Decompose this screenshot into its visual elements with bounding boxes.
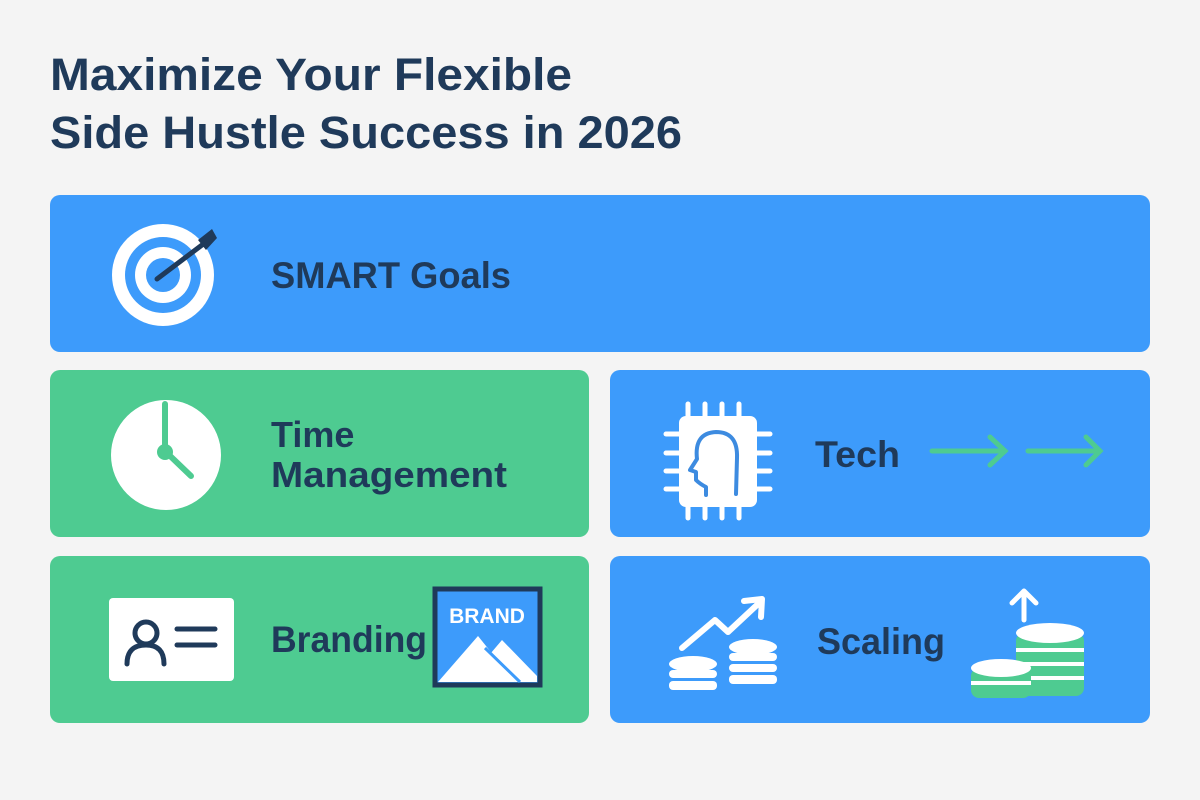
icon: profile card bbox=[109, 598, 234, 681]
icon: clock bbox=[111, 400, 221, 510]
title bbox=[50, 49, 682, 158]
arrows bbox=[932, 437, 1100, 465]
title: Maximize Your Flexible bbox=[50, 49, 572, 100]
panel: Branding bbox=[50, 556, 589, 723]
panel: Time Management bbox=[50, 370, 589, 537]
icon: brand poster bbox=[435, 589, 540, 685]
panel: SMART Goals bbox=[50, 195, 1150, 352]
icon: growth coins bbox=[669, 599, 777, 690]
icon: brand poster: BRAND bbox=[449, 605, 525, 628]
label: Tech: Tech bbox=[815, 434, 900, 475]
panel: Tech bbox=[610, 370, 1150, 537]
title: Side Hustle Success in 2026 bbox=[50, 107, 682, 158]
icon: coin stack with arrow bbox=[971, 591, 1084, 698]
icon: target bbox=[112, 224, 217, 326]
label: SMART Goals: SMART Goals bbox=[271, 255, 511, 296]
panel: Scaling bbox=[610, 556, 1150, 723]
label: Scaling: Scaling bbox=[817, 621, 945, 662]
label: Time Management: Management bbox=[271, 454, 507, 495]
label: Time Management: Time bbox=[271, 414, 354, 455]
label: Branding: Branding bbox=[271, 619, 427, 660]
icon: chip with head bbox=[666, 404, 770, 518]
